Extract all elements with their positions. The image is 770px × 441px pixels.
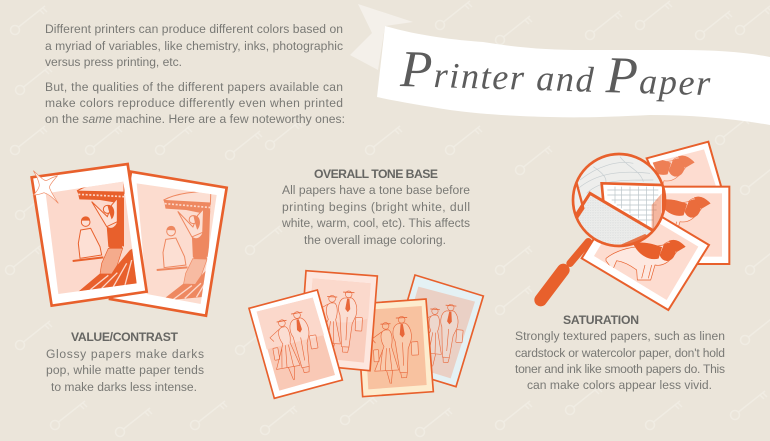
intro text: Different printers can produce different colors based on: [45, 22, 343, 36]
heading and text: saturation: cardstock or watercolor paper, don't hold: [515, 346, 725, 360]
intro text: But, the qualities of the different papers available can: [45, 80, 343, 94]
intro text: on the same machine. Here are a few noteworthy ones:: [45, 112, 345, 126]
heading and text: value contrast: to make darks less intense.: [51, 380, 197, 394]
illustration: saturation magnifier: [541, 142, 729, 310]
photo: front dog: [580, 216, 710, 312]
heading and text: overall tone base: white, warm, cool, etc). This affects: [281, 216, 470, 230]
heading and text: value contrast: pop, while matte paper tends: [46, 363, 204, 377]
heading and text: saturation: Strongly textured papers, such as linen: [515, 329, 725, 343]
heading and text: saturation: [515, 313, 725, 392]
photo: matte: [110, 172, 227, 316]
heading and text: overall tone base: printing begins (bright white, dull: [282, 200, 470, 214]
heading and text: saturation: toner and ink like smooth papers do. This: [515, 362, 725, 376]
title ribbon: [350, 4, 770, 125]
heading and text: overall tone base: [281, 167, 470, 247]
heading and text: value contrast: [46, 330, 204, 394]
intro text: a myriad of variables, like chemistry, inks, photographic: [45, 39, 343, 53]
illustration: value contrast photos: [32, 164, 227, 316]
heading and text: overall tone base: All papers have a tone base before: [282, 183, 470, 197]
heading and text: overall tone base: OVERALL TONE BASE: [314, 167, 438, 181]
intro text: versus press printing, etc.: [45, 55, 182, 69]
photo: cool paper: [388, 275, 483, 387]
icon: gloss sparkle: [33, 171, 58, 203]
intro text: make colors reproduce differently even when printed: [45, 96, 343, 110]
photo: glossy: [32, 164, 147, 306]
heading and text: saturation: SATURATION: [563, 313, 639, 327]
photo: back dog: [645, 140, 722, 186]
heading and text: saturation: can make colors appear less vivid.: [527, 378, 712, 392]
icon: magnifier handle: [541, 242, 588, 300]
intro text: [45, 22, 345, 126]
icon: magnifier lens with paper textures: [573, 154, 665, 253]
illustration: tone base photos: [249, 271, 483, 398]
photo: bright white paper: [249, 290, 342, 398]
photo: dull white paper: [299, 271, 377, 371]
heading and text: value contrast: VALUE/CONTRAST: [71, 330, 179, 344]
photo: middle dog: [664, 186, 730, 265]
heading and text: value contrast: Glossy papers make darks: [46, 347, 204, 361]
photo: warm paper: [357, 299, 433, 397]
heading and text: overall tone base: the overall image coloring.: [304, 233, 446, 247]
title: Printer and Paper: [399, 41, 712, 107]
